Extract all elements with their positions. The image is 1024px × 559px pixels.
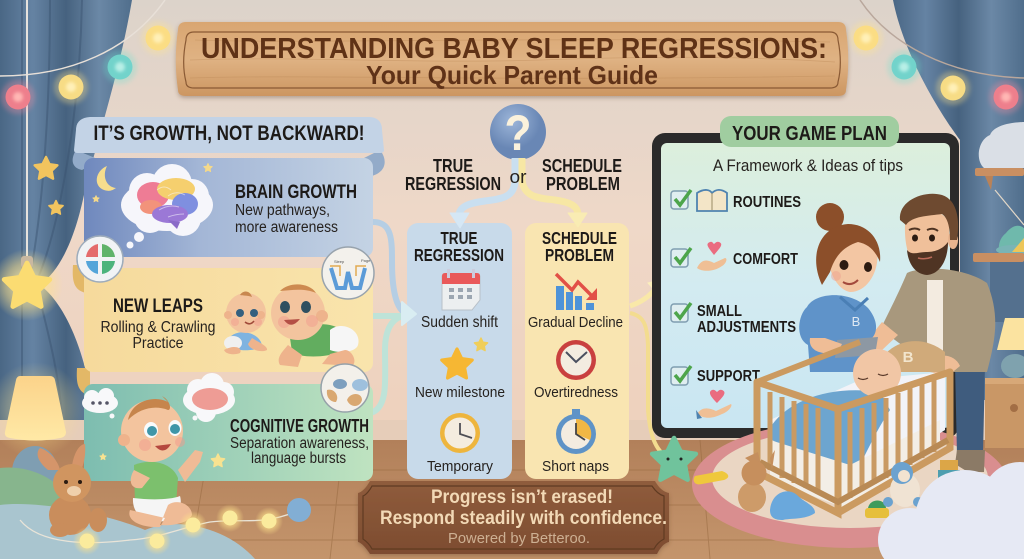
left curtain [0,0,132,420]
arrowhead: into true regression [402,302,416,325]
decision labels: PROBLEM [546,173,620,194]
question mark icon: ? [504,105,532,161]
card: schedule problem [525,223,629,479]
item: comfort: COMFORT [733,251,798,268]
icon: crescent moon [97,166,116,191]
subheading: A Framework & Ideas of tips [713,157,903,175]
right string lights [849,0,1024,114]
footer credit: Powered by Betteroo. [448,530,590,547]
toy: yellow rattle [694,471,728,484]
icon: milestone star [442,338,488,378]
crib with sleeping baby [757,341,950,513]
icon badge: sleep chart [322,247,374,299]
heading banner [73,117,385,176]
mother [799,203,880,372]
small crawling baby [224,291,267,354]
item: small adjustments: SMALL [697,303,742,320]
icon: calendar [442,269,480,310]
card: cognitive growth: Separation awareness, [230,435,369,452]
icon badge: game wheel [77,236,123,282]
arrowhead: blue branch [450,213,469,228]
arrowhead: yellow branch [568,213,587,227]
icon: clock [440,413,480,453]
card: true regression: REGRESSION [414,245,504,265]
icon badge: sleep chart: Sleep [334,259,345,264]
nightstand and lamp [985,318,1024,448]
card: brain growth: New pathways, [235,202,330,219]
father [866,194,995,472]
card: schedule problem: Short naps [542,458,609,475]
icon: declining bar chart [556,274,597,310]
footer plank [358,481,669,554]
flow arrows to game plan [630,280,668,458]
item: comfort [671,242,798,271]
crib with sleeping baby: B [903,349,914,366]
big crawling baby [271,284,359,367]
card: new leaps: Practice [132,335,184,352]
card: brain growth [84,158,373,257]
subtitle text: Your Quick Parent Guide [366,60,658,90]
card: cognitive growth: language bursts [251,450,346,467]
toy rabbit [38,444,107,537]
item: support: SUPPORT [697,368,760,385]
card: brain growth: more awareness [235,219,338,236]
toy: green star [652,438,696,480]
string lights on floor [20,498,311,555]
item: small adjustments [671,303,796,336]
heading badge [720,116,899,147]
right shelves with toys [973,122,1024,262]
heading banner: IT’S GROWTH, NOT BACKWARD! [94,122,364,145]
floor pillows [0,467,255,559]
icon: small brain thought [183,373,235,422]
icon: stopwatch [556,409,596,454]
card: new leaps: NEW LEAPS [113,296,203,317]
icon badge: sleep chart: Page [361,258,371,263]
card: schedule problem: Overtiredness [534,384,618,401]
icon: glowing star lamp [0,249,63,321]
mother: B [852,314,860,329]
toy: bunny on rug [738,450,775,512]
toy: stacked car [865,500,889,518]
item: small adjustments: ADJUSTMENTS [697,319,796,336]
icon: red clock [556,340,596,380]
card: true regression: New milestone [415,384,505,401]
item: routines: ROUTINES [733,194,801,211]
icon: speech cloud [82,388,118,418]
question mark icon [490,104,546,161]
decision labels [405,155,622,194]
left string lights [0,0,175,265]
decision labels: or [510,167,526,187]
flow arrow: panels to true regression [373,222,408,412]
item: support [671,366,760,419]
toy: blue whale [770,491,815,520]
panel: game plan tablet [652,116,959,438]
icon: brain in thought cloud [121,164,213,248]
decision labels: REGRESSION [405,173,501,194]
card: schedule problem: Gradual Decline [528,314,623,331]
item: routines [671,190,801,211]
decision labels: TRUE [433,155,473,176]
right curtain [893,0,1024,400]
toy: blue monkey [883,462,923,507]
card: cognitive growth: COGNITIVE GROWTH [230,416,369,436]
table lamp [0,362,84,498]
card: true regression: Sudden shift [421,314,499,331]
toy: stacked blocks [936,460,962,491]
sitting baby [118,396,203,527]
card: new leaps [77,236,374,372]
footer message: Respond steadily with confidence. [380,508,667,529]
title plank [176,22,848,96]
decision labels: SCHEDULE [542,155,622,176]
card: cognitive growth [82,364,373,481]
card: true regression: TRUE [440,228,478,248]
decorative wall stars [35,157,63,214]
icon badge: conversation [321,364,369,412]
curl ribbons [73,265,90,396]
title text: UNDERSTANDING BABY SLEEP REGRESSIONS: [201,33,827,65]
flow arrows from question mark [459,158,578,216]
card text: BRAIN GROWTH [235,182,357,203]
panel: it's growth [73,117,385,481]
card: new leaps: Rolling & Crawling [100,319,216,336]
card: true regression [407,223,512,479]
footer text: Progress isn’t erased! [431,487,613,508]
foreground cloud [878,462,1024,559]
card: true regression: Temporary [427,458,493,475]
card: schedule problem: PROBLEM [545,245,614,265]
rug [692,420,1008,548]
card: schedule problem: SCHEDULE [542,228,617,248]
heading badge: YOUR GAME PLAN [732,122,887,145]
